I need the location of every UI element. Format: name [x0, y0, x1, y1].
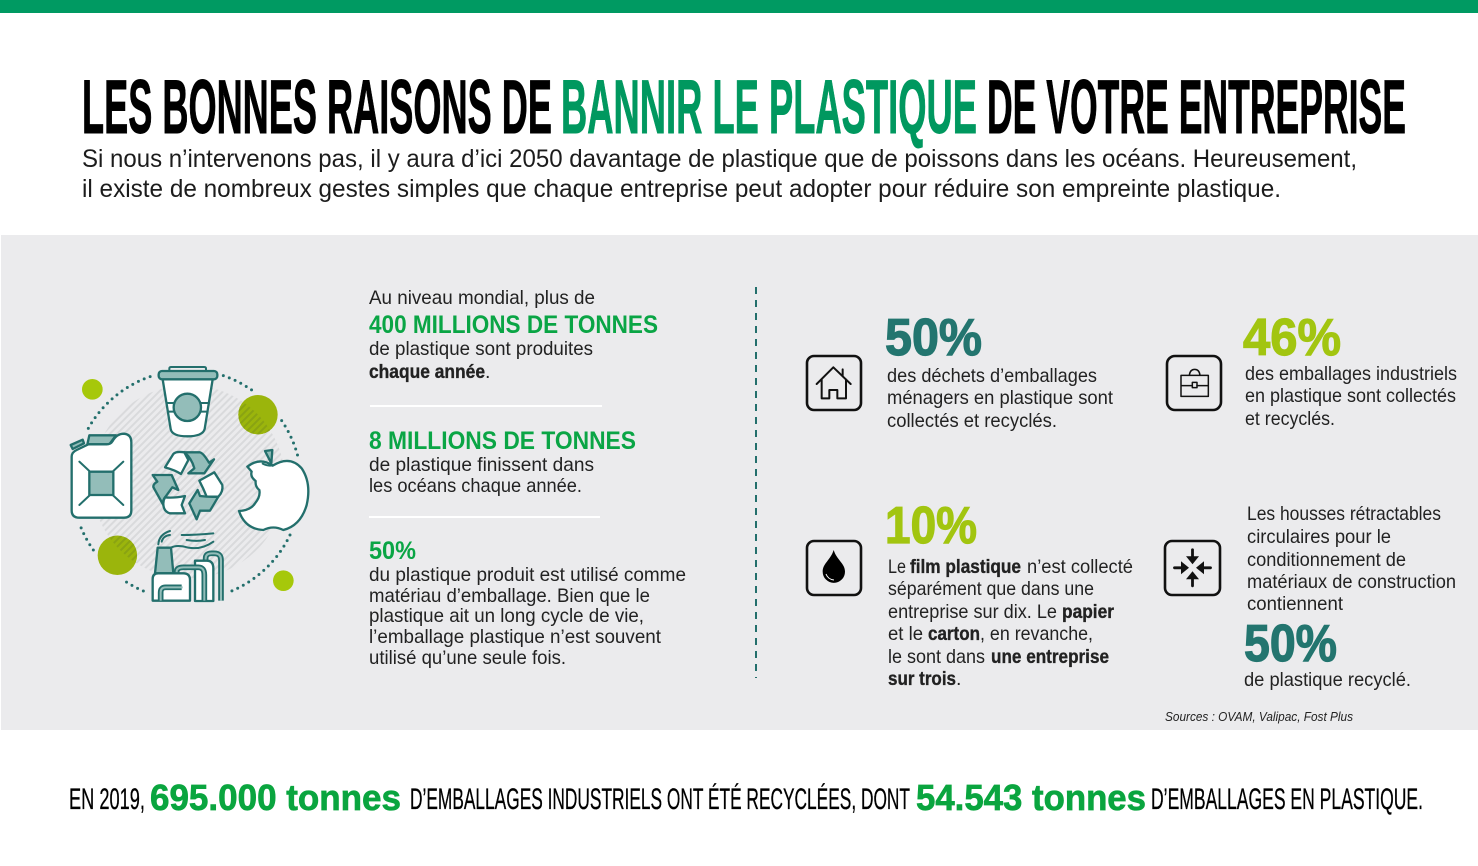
icon: factory — [153, 531, 221, 601]
text block: world production: Au niveau mondial, plus de — [369, 287, 595, 309]
stat: 10% film: une entreprise — [991, 646, 1109, 668]
stat: 50% household — [885, 309, 1114, 432]
subtitle text: Si nous n’intervenons pas, il y aura d’ici 2050 davantage de plastique que de poissons dans les océans. Heureusement, — [82, 145, 1357, 173]
text block: packaging use: plastique ait un long cycle de vie, — [369, 605, 644, 627]
text block: world production — [369, 287, 658, 383]
text block: oceans — [369, 427, 636, 497]
text block: packaging use: utilisé qu’une seule fois. — [369, 647, 566, 669]
text block: world production: chaque année — [369, 361, 485, 383]
stat: 10% film: Le — [888, 556, 906, 578]
stat: 50% household: 50% — [885, 309, 982, 367]
title: LES BONNES RAISONS DE — [82, 65, 552, 150]
stat: 10% film: sur trois — [888, 668, 956, 690]
icon: coffee cup — [159, 367, 217, 436]
icon: briefcase — [1167, 356, 1221, 410]
stat: 46% industrial: en plastique sont collectés — [1245, 385, 1456, 407]
stat: 10% film — [885, 497, 1133, 690]
stat: stretch hoods 50%: circulaires pour le — [1247, 526, 1391, 548]
stat: stretch hoods 50%: contiennent — [1247, 593, 1344, 615]
stat: 46% industrial: et recyclés. — [1245, 408, 1335, 430]
stat: 50% household: ménagers en plastique sont — [887, 387, 1114, 409]
illustration: plastic items around recycling symbol — [71, 367, 308, 601]
grey panel — [1, 235, 1478, 730]
text block: world production: . — [485, 361, 490, 383]
stat: 46% industrial: des emballages industriels — [1245, 363, 1457, 385]
sources: Sources : OVAM, Valipac, Fost Plus — [1165, 710, 1353, 724]
stat: 10% film: séparément que dans une — [888, 578, 1094, 600]
text block: oceans: de plastique finissent dans — [369, 454, 594, 476]
stat: 10% film: le sont dans — [888, 646, 985, 668]
stat: stretch hoods 50%: matériaux de construction — [1247, 571, 1456, 593]
stat: 10% film: papier — [1062, 601, 1114, 623]
stat: stretch hoods 50%: conditionnement de — [1247, 549, 1406, 571]
bottom banner statement: EN 2019, — [69, 783, 145, 816]
stat: 50% household: des déchets d’emballages — [887, 365, 1097, 387]
bottom banner statement: 54.543 tonnes — [916, 777, 1146, 818]
text block: world production: 400 MILLIONS DE TONNES — [369, 311, 658, 339]
stat: 50% household: collectés et recyclés. — [887, 410, 1057, 432]
stat: 46% industrial — [1243, 309, 1457, 430]
stat: stretch hoods 50% — [1244, 503, 1456, 691]
stat: stretch hoods 50%: de plastique recyclé. — [1244, 669, 1411, 691]
top green bar — [0, 0, 1478, 13]
bottom banner statement: 695.000 tonnes — [150, 777, 401, 818]
text block: packaging use: 50% — [369, 537, 416, 565]
stat: 10% film: et le — [888, 623, 923, 645]
icon: oil drop — [807, 541, 861, 595]
icon: recycling arrows — [153, 452, 222, 519]
subtitle text: il existe de nombreux gestes simples que chaque entreprise peut adopter pour réduire son empreinte plastique. — [82, 175, 1281, 203]
stat: 10% film: film plastique — [910, 556, 1021, 578]
stat: 10% film: . — [956, 668, 961, 690]
stat: 46% industrial: 46% — [1243, 309, 1341, 367]
text block: oceans: 8 MILLIONS DE TONNES — [369, 427, 636, 455]
text block: packaging use — [369, 537, 686, 669]
stat: 10% film: 10% — [885, 497, 977, 555]
text block: world production: de plastique sont produites — [369, 338, 593, 360]
text block: packaging use: l’emballage plastique n’est souvent — [369, 626, 662, 648]
stat: 10% film: carton — [928, 623, 980, 645]
icon: bitten apple — [239, 450, 308, 530]
icon: house — [807, 356, 861, 410]
title: BANNIR LE PLASTIQUE — [561, 65, 977, 150]
stat: 10% film: , en revanche, — [980, 623, 1093, 645]
text block: oceans: les océans chaque année. — [369, 475, 582, 497]
text block: packaging use: matériau d’emballage. Bien que le — [369, 585, 650, 607]
stat: 10% film: entreprise sur dix. Le — [888, 601, 1057, 623]
icon: jerry can — [71, 434, 131, 518]
bottom banner statement — [69, 777, 1423, 818]
stat: stretch hoods 50%: Les housses rétractables — [1247, 503, 1441, 525]
bottom banner statement: D’EMBALLAGES INDUSTRIELS ONT ÉTÉ RECYCLÉES, DONT — [410, 783, 910, 816]
stat: 10% film: n’est collecté — [1027, 556, 1133, 578]
icon: compress arrows — [1165, 541, 1220, 595]
text block: packaging use: du plastique produit est utilisé comme — [369, 564, 686, 586]
stat: stretch hoods 50%: 50% — [1244, 615, 1337, 673]
subtitle text — [82, 145, 1357, 203]
